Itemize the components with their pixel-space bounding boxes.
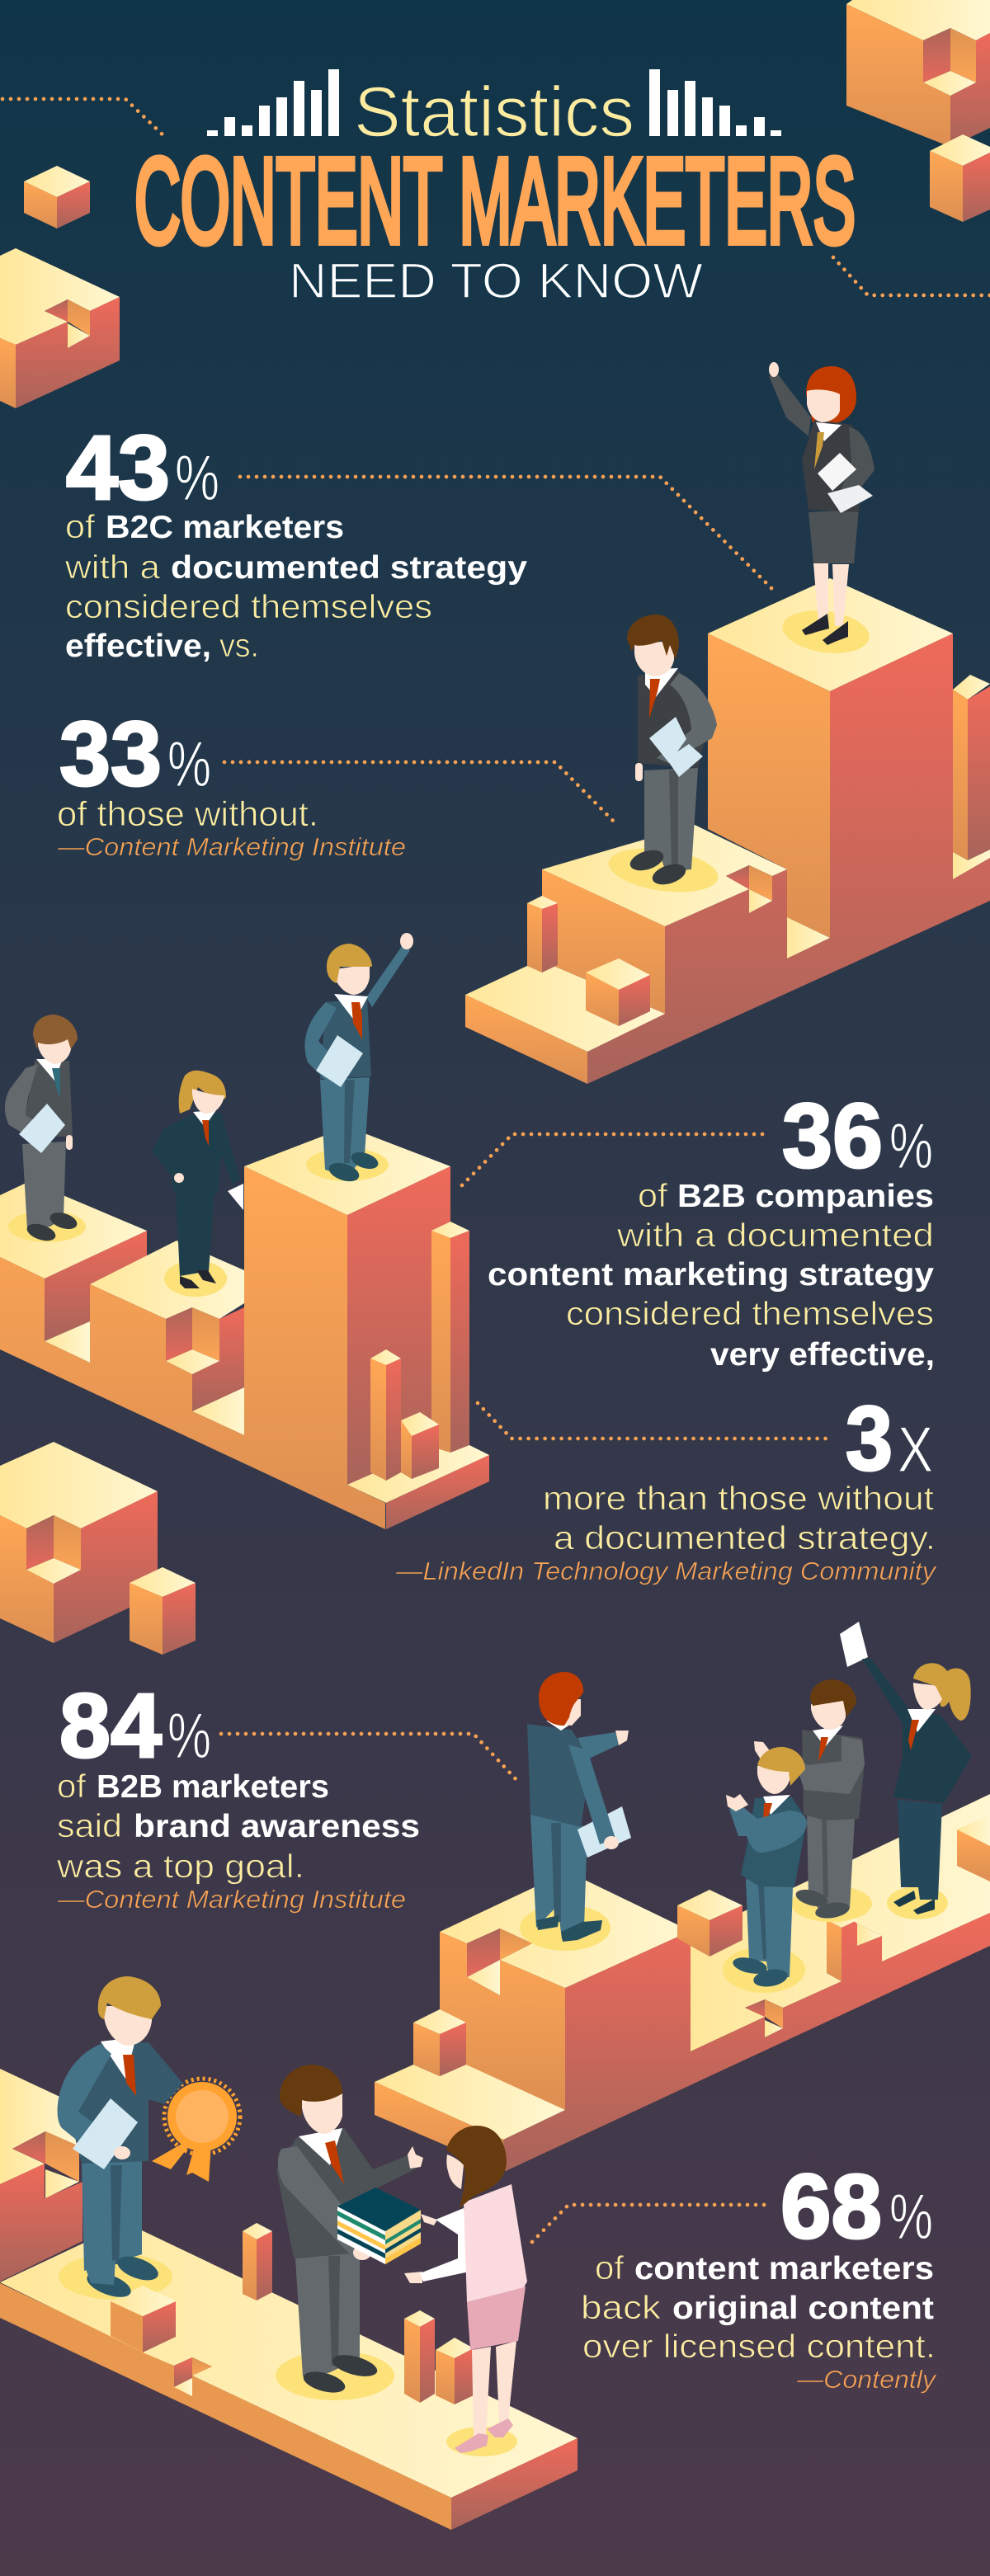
body text: considered themselves [65, 589, 432, 625]
platform top [0, 2223, 578, 2498]
dotted connector: 68 percent [532, 2205, 769, 2242]
title [134, 69, 856, 308]
stage: bottom platform [0, 2069, 578, 2530]
lower ledge [375, 2065, 565, 2171]
box at right edge [957, 1815, 990, 1881]
number: 84 [59, 1675, 162, 1777]
second step right face [192, 1307, 244, 1411]
second step notch [726, 865, 772, 913]
decorative cube: mid left [130, 1567, 196, 1655]
number: 68 [780, 2156, 882, 2258]
small cube [401, 1412, 439, 1479]
stage: second platform [0, 1127, 489, 1529]
person: blonde man raising arm [304, 933, 413, 1184]
person: blonde man clapping [726, 1747, 807, 1989]
icon: stack of books [337, 2187, 421, 2264]
dotted connector: top right [833, 257, 990, 295]
platform right face [451, 2438, 578, 2530]
notch [166, 1307, 219, 1374]
column left [243, 2223, 272, 2301]
dotted connector: 3x [478, 1403, 830, 1439]
person shadows [520, 1886, 948, 1993]
stat: 36 percent [488, 1085, 935, 1373]
second step top [90, 1241, 244, 1319]
stage: third platform [375, 1794, 990, 2171]
decorative block: top right [846, 0, 990, 147]
cube [111, 2286, 176, 2352]
source: —Content Marketing Institute [57, 1885, 406, 1914]
left column right face [45, 1231, 147, 1341]
equalizer bars left [207, 69, 339, 136]
platform top [691, 1794, 990, 2051]
body text: over licensed content. [582, 2329, 936, 2365]
person: blonde man with rosette [58, 1976, 183, 2302]
dotted connector: 33 percent [224, 762, 615, 822]
body text: of [638, 1178, 668, 1214]
tall column top [708, 578, 953, 691]
stat: 68 percent [581, 2156, 938, 2394]
upper ledge top [0, 2069, 79, 2184]
decorative cube: top left [24, 166, 90, 228]
stat: 84 percent [56, 1675, 420, 1914]
base ledge [347, 1439, 489, 1529]
body text: content marketers [634, 2251, 934, 2286]
percent sign: % [167, 728, 211, 800]
heading: Need to know: NEED TO KNOW [289, 253, 703, 308]
body text: effective, [65, 629, 211, 664]
dotted connector: 43 percent [240, 477, 776, 592]
body text: B2B companies [677, 1179, 934, 1214]
body text: very effective, [710, 1337, 935, 1373]
second step left face [542, 869, 665, 1014]
source: —LinkedIn Technology Marketing Community [395, 1556, 938, 1585]
body text: of those without. [57, 794, 318, 833]
number: 33 [59, 704, 162, 805]
person: ponytail woman raising paper [840, 1622, 972, 1914]
platform notch [174, 2357, 212, 2396]
body text: considered themselves [566, 1296, 934, 1332]
body text: of [57, 1768, 87, 1805]
main block left face [440, 1932, 565, 2110]
percent sign: % [167, 1699, 211, 1772]
person: woman in pink [404, 2126, 527, 2453]
cube on ledge [413, 2009, 466, 2076]
tall column left face [708, 633, 830, 938]
number: 43 [66, 417, 170, 519]
person shadows [59, 2253, 517, 2456]
person: man with brown hair giving books [276, 2065, 423, 2396]
decorative block: mid left [0, 1442, 158, 1643]
body text [64, 509, 527, 664]
icon: award rosette [152, 2079, 240, 2182]
percent sign: % [889, 1109, 933, 1182]
body text: B2C marketers [106, 510, 344, 545]
wedges [45, 1321, 244, 1435]
cube on platform [677, 1890, 742, 1957]
person: left man with paper [5, 1015, 79, 1244]
source: —Content Marketing Institute [57, 832, 406, 861]
thin column [527, 896, 558, 972]
dotted connector: 84 percent [221, 1734, 519, 1782]
body text: documented strategy [171, 550, 527, 586]
body text: brand awareness [134, 1809, 420, 1844]
tall column and base right face [587, 633, 990, 1084]
body text: with a documented [616, 1217, 934, 1254]
person: woman with blonde hair [152, 1071, 240, 1288]
person: man with brown hair holding paper [606, 615, 721, 898]
main block notch [467, 1928, 532, 1995]
tall column top [244, 1127, 450, 1215]
paper held by woman, behind tall column edge [228, 1184, 243, 1210]
shadow: left man [8, 1211, 86, 1242]
column right [404, 2310, 435, 2403]
body text [56, 1768, 420, 1885]
column on platform [827, 1912, 857, 1981]
stat: 3x [395, 1388, 938, 1585]
small cube [436, 2338, 474, 2404]
person: woman with red hair raising arm [769, 362, 874, 658]
tall thin bar [431, 1222, 469, 1453]
equalizer bars right [649, 69, 781, 136]
body text [581, 2250, 936, 2365]
small cube [586, 958, 650, 1026]
percent sign: % [889, 2180, 933, 2253]
long right face [503, 1913, 990, 2171]
left column top [0, 1181, 147, 1279]
cube top re-draw over shadow [111, 2286, 176, 2316]
body text: vs. [219, 628, 259, 664]
source: —Contently [796, 2365, 938, 2394]
body text: with a [64, 549, 161, 586]
body text: more than those without [543, 1481, 934, 1517]
second step top [542, 825, 787, 926]
body text: of [65, 509, 96, 545]
body text: back [581, 2290, 662, 2326]
platform left face [0, 2283, 451, 2530]
upper ledge right face [0, 2164, 82, 2282]
percent sign: % [175, 441, 219, 514]
body text: B2B marketers [97, 1769, 329, 1805]
shadow: blonde man [306, 1148, 389, 1181]
person: man with red hair pointing [527, 1672, 631, 1942]
multiplier: X [898, 1413, 933, 1486]
shadow: woman [164, 1260, 227, 1297]
short thin bar [370, 1349, 401, 1481]
body text: original content [672, 2291, 934, 2326]
dotted connector: top left [2, 99, 167, 139]
stat: 43 percent [64, 417, 527, 664]
number: 36 [782, 1085, 883, 1187]
number: 3 [846, 1388, 893, 1490]
yellow wedge [857, 1924, 882, 1946]
body text: said [57, 1808, 122, 1844]
body text: content marketing strategy [488, 1257, 934, 1293]
left faces [0, 1166, 385, 1529]
upper ledge notch [12, 2131, 79, 2198]
decorative cube: top right small [930, 134, 990, 222]
stat: 33 percent [57, 704, 406, 861]
right edge column [953, 675, 990, 879]
heading: Statistics: Statistics [354, 73, 634, 152]
tall column right face [347, 1166, 450, 1485]
ledge [465, 961, 665, 1084]
platform notch [745, 1999, 783, 2037]
person: man with brown hair, arms out [754, 1679, 865, 1921]
stage: top platform [465, 578, 990, 1084]
decorative block: left [0, 248, 120, 408]
body text: was a top goal. [56, 1848, 304, 1885]
dotted connector: 36 percent [462, 1134, 765, 1185]
main block top [440, 1872, 691, 1988]
body text [488, 1178, 935, 1373]
yellow wedge [787, 917, 830, 958]
stat: 3x: a documented strategy. [554, 1520, 936, 1556]
body text: of [595, 2250, 625, 2286]
